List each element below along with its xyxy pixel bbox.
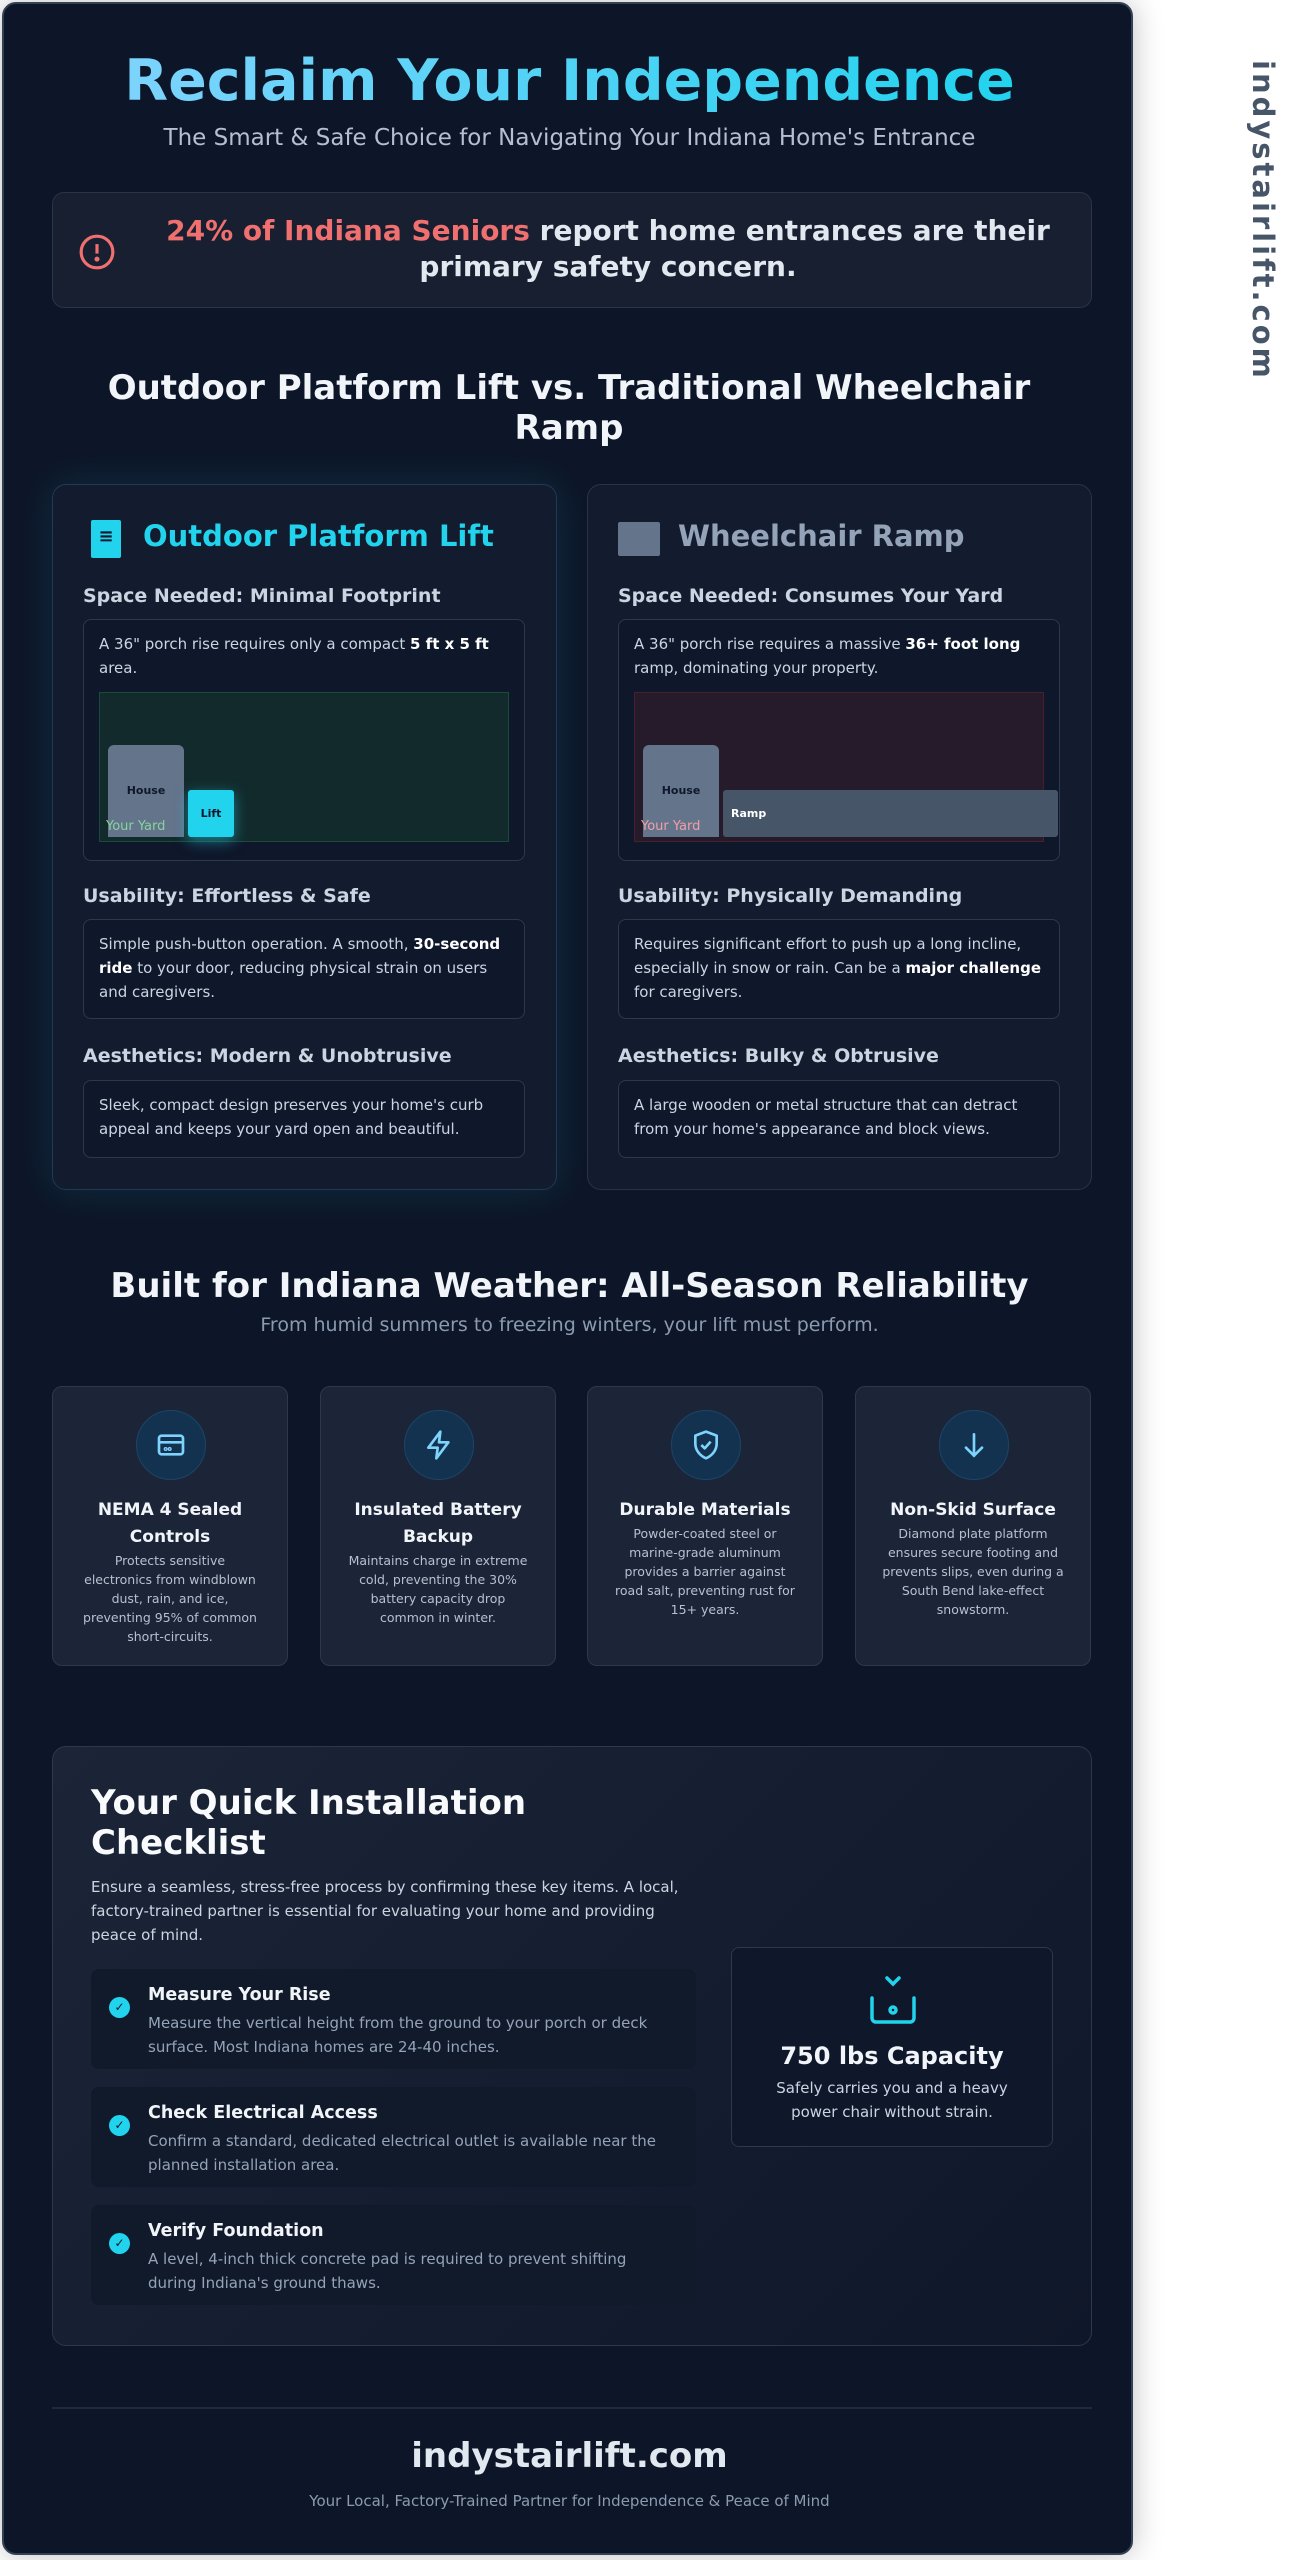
diagram: ramp bbox=[634, 692, 1044, 842]
card: battery: Maintains charge in extreme cold, preventing the 30% battery capacity drop common in winter. bbox=[349, 1553, 527, 1625]
card: materials bbox=[587, 1386, 823, 1666]
subtitle: The Smart & Safe Choice for Navigating Your Indiana Home's Entrance bbox=[164, 125, 975, 151]
heading aesthetics: Aesthetics: Bulky & Obtrusive bbox=[618, 1045, 939, 1067]
box usability: Requires significant effort to push up a long incline, especially in snow or rain. Can be a major challenge for caregivers. bbox=[634, 935, 1041, 1001]
card: battery: Insulated Battery Backup bbox=[354, 1500, 522, 1547]
item: electrical: Check Electrical Access bbox=[148, 2103, 378, 2123]
item: electrical: ✓ bbox=[114, 2118, 125, 2132]
heading usability: Usability: Effortless & Safe bbox=[83, 885, 371, 907]
diagram: lift: House bbox=[127, 784, 165, 797]
item: rise bbox=[91, 1969, 696, 2069]
card: NEMA: Protects sensitive electronics from windblown dust, rain, and ice, preventing 95% of common short-circuits. bbox=[83, 1553, 257, 1644]
heading space: Space Needed: Consumes Your Yard bbox=[618, 585, 1003, 607]
heading space: Space Needed: Minimal Footprint bbox=[83, 585, 441, 607]
item: rise: Measure Your Rise bbox=[148, 1985, 331, 2005]
icon: arrow down bbox=[939, 1410, 1009, 1480]
heading usability: Usability: Physically Demanding bbox=[618, 885, 962, 907]
alert text: 24% of Indiana Seniors report home entrances are their primary safety concern. bbox=[166, 214, 1050, 283]
footer brand: indystairlift.com bbox=[411, 2436, 728, 2476]
icon: shield bbox=[671, 1410, 741, 1480]
checklist title: Your Quick Installation Checklist bbox=[91, 1783, 526, 1863]
card: materials: Powder-coated steel or marine-grade aluminum provides a barrier against road salt, preventing rust for 15+ years. bbox=[615, 1526, 795, 1617]
diagram: ramp: Your Yard bbox=[641, 819, 700, 834]
icon: bolt bbox=[404, 1410, 474, 1480]
box usability bbox=[83, 919, 525, 1019]
icon: alert bbox=[80, 234, 114, 270]
item: rise: ✓ bbox=[114, 2000, 125, 2014]
box aesthetics: A large wooden or metal structure that can detract from your home's appearance and block views. bbox=[634, 1096, 1017, 1138]
card: NEMA bbox=[52, 1386, 288, 1666]
card: battery bbox=[320, 1386, 556, 1666]
capacity card: Safely carries you and a heavy power chair without strain. bbox=[776, 2079, 1008, 2121]
diagram: lift: Lift bbox=[201, 807, 221, 820]
box usability: Simple push-button operation. A smooth, 30-second ride to your door, reducing physical strain on users and caregivers. bbox=[99, 935, 500, 1001]
vertical brand text: indystairlift.com bbox=[1246, 60, 1280, 381]
ramp title: Wheelchair Ramp bbox=[678, 519, 965, 553]
item: electrical: Confirm a standard, dedicated electrical outlet is available near the planned installation area. bbox=[148, 2132, 656, 2174]
box space bbox=[618, 619, 1060, 861]
heading: comparison: Outdoor Platform Lift vs. Traditional Wheelchair Ramp bbox=[108, 368, 1030, 448]
icon: lift: ≡ bbox=[98, 526, 114, 547]
heading aesthetics: Aesthetics: Modern & Unobtrusive bbox=[83, 1045, 452, 1067]
diagram: ramp: House bbox=[662, 784, 700, 797]
card: non-skid bbox=[855, 1386, 1091, 1666]
item: foundation: ✓ bbox=[114, 2236, 125, 2250]
box space bbox=[83, 619, 525, 861]
item: foundation: A level, 4-inch thick concrete pad is required to prevent shifting during Indiana's ground thaws. bbox=[148, 2250, 626, 2292]
capacity card bbox=[731, 1947, 1053, 2147]
icon: lift bbox=[91, 520, 121, 558]
icon: ramp bbox=[618, 522, 660, 556]
footer tagline: Your Local, Factory-Trained Partner for Independence & Peace of Mind bbox=[309, 2492, 830, 2510]
weather subtitle: From humid summers to freezing winters, your lift must perform. bbox=[260, 1314, 879, 1336]
item: foundation bbox=[91, 2205, 696, 2305]
lift title: Outdoor Platform Lift bbox=[143, 519, 494, 553]
item: electrical bbox=[91, 2087, 696, 2187]
diagram: ramp: Ramp bbox=[731, 807, 766, 820]
title: Reclaim Your Independence bbox=[124, 48, 1015, 114]
card: materials: Durable Materials bbox=[619, 1500, 791, 1520]
item: foundation: Verify Foundation bbox=[148, 2221, 324, 2241]
box aesthetics bbox=[618, 1080, 1060, 1158]
checklist desc: Ensure a seamless, stress-free process by confirming these key items. A local, factory-trained partner is essential for evaluating your home and providing peace of mind. bbox=[91, 1878, 679, 1944]
icon: capacity bbox=[870, 1976, 916, 2024]
box aesthetics: Sleek, compact design preserves your home's curb appeal and keeps your yard open and beautiful. bbox=[99, 1096, 483, 1138]
diagram: lift: Your Yard bbox=[106, 819, 165, 834]
capacity card: 750 lbs Capacity bbox=[780, 2042, 1004, 2070]
panel: checklist bbox=[52, 1746, 1092, 2346]
card: non-skid: Non-Skid Surface bbox=[890, 1500, 1056, 1520]
panel: lift bbox=[52, 484, 557, 1190]
box usability bbox=[618, 919, 1060, 1019]
box space: A 36" porch rise requires a massive 36+ foot long ramp, dominating your property. bbox=[634, 635, 1020, 677]
alert callout bbox=[52, 192, 1092, 308]
box space: A 36" porch rise requires only a compact 5 ft x 5 ft area. bbox=[99, 635, 489, 677]
card: non-skid: Diamond plate platform ensures secure footing and prevents slips, even during a South Bend lake-effect snowstorm. bbox=[882, 1526, 1064, 1617]
diagram: lift bbox=[99, 692, 509, 842]
icon: controls bbox=[136, 1410, 206, 1480]
item: rise: Measure the vertical height from the ground to your porch or deck surface. Most Indiana homes are 24-40 inches. bbox=[148, 2014, 647, 2056]
heading: weather: Built for Indiana Weather: All-Season Reliability bbox=[110, 1266, 1029, 1306]
box aesthetics bbox=[83, 1080, 525, 1158]
card: NEMA: NEMA 4 Sealed Controls bbox=[98, 1500, 242, 1547]
panel: ramp bbox=[587, 484, 1092, 1190]
